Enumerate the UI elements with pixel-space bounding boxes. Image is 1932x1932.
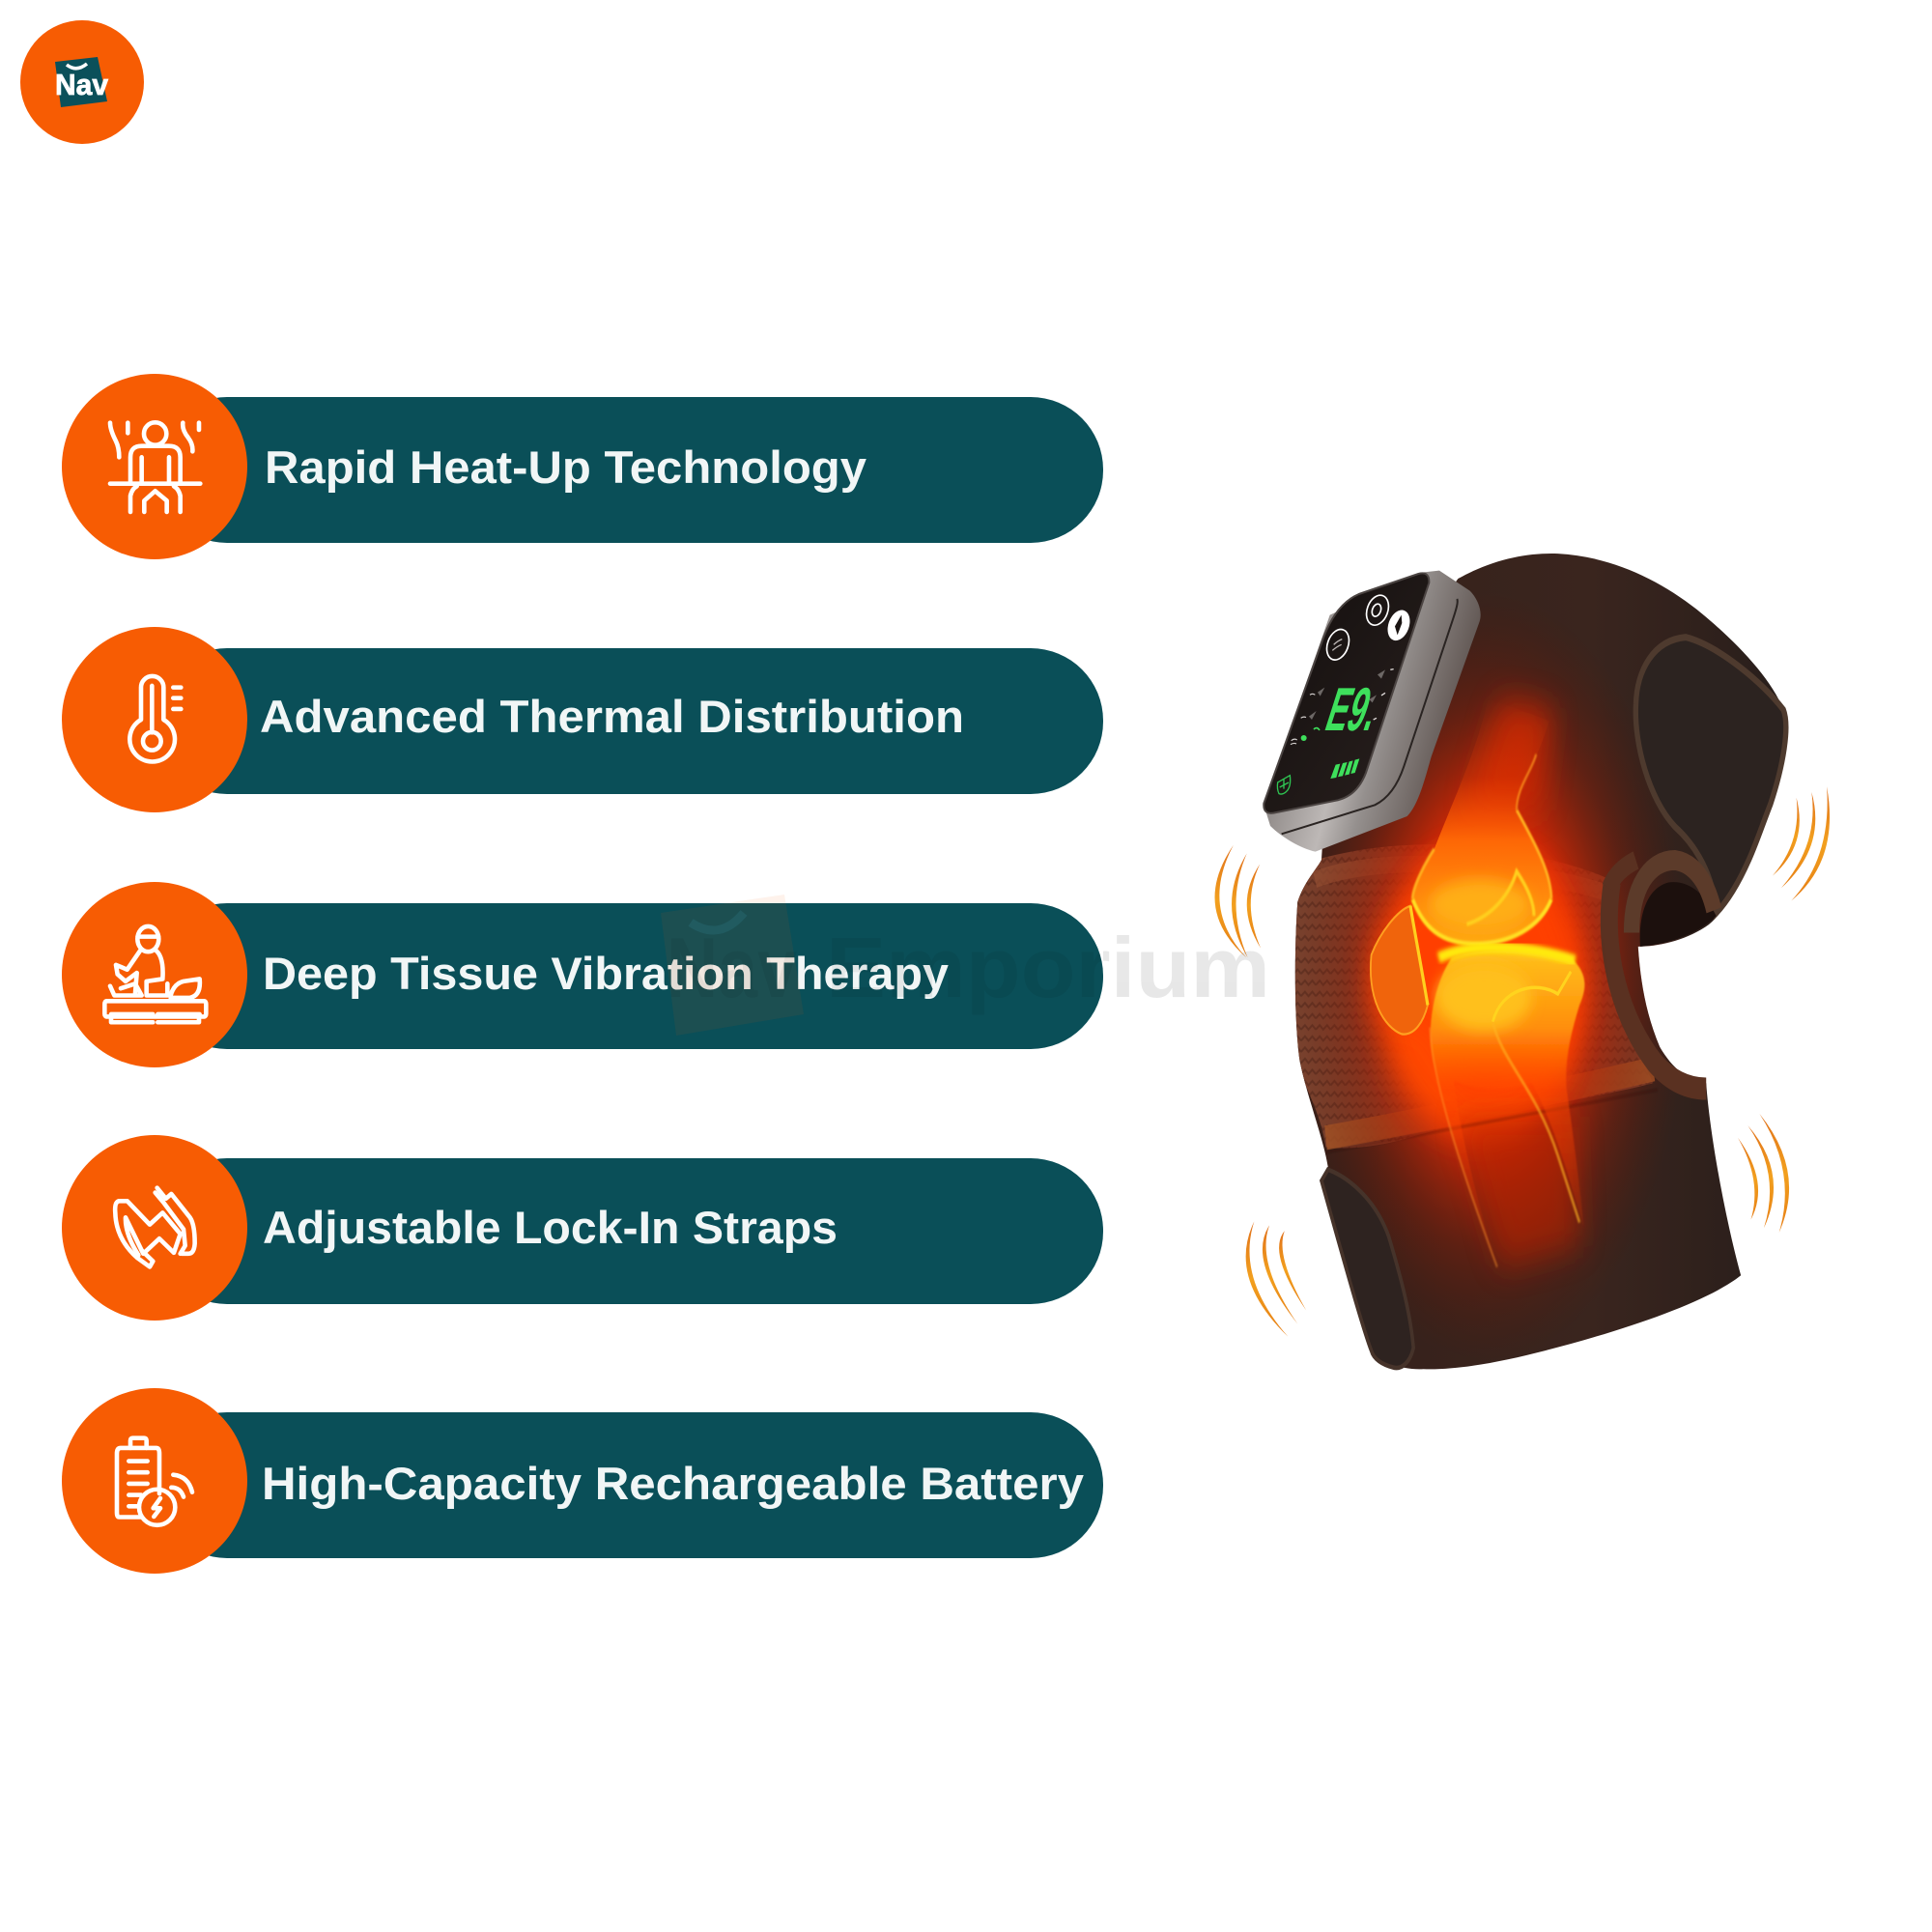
patella <box>1371 906 1428 1035</box>
watermark: Emporium <box>826 920 1270 1015</box>
icon: massage therapist <box>104 926 206 1022</box>
label: Advanced Thermal Distribution <box>260 691 964 742</box>
touch buttons <box>1322 592 1414 663</box>
mesh band and glow <box>1294 632 1671 1323</box>
feature row: Adjustable Lock-In Straps <box>62 1135 1103 1321</box>
icon: thermometer <box>129 676 181 761</box>
label: High-Capacity Rechargeable Battery <box>262 1458 1084 1509</box>
control unit with LED display <box>1264 571 1481 852</box>
tibia <box>1431 950 1584 1278</box>
watermark <box>661 895 1270 1036</box>
indicators <box>1291 669 1394 745</box>
upper strap flap <box>1635 638 1786 913</box>
femur <box>1412 698 1551 944</box>
label: Deep Tissue Vibration Therapy <box>263 948 949 999</box>
label: Rapid Heat-Up Technology <box>265 441 867 493</box>
shield icon <box>1277 776 1291 794</box>
battery bars <box>1330 758 1359 779</box>
arcs top right <box>1773 786 1830 901</box>
feature row: Deep Tissue Vibration Therapy <box>62 882 1103 1067</box>
watermark: Nav <box>667 920 797 1015</box>
arcs bottom right <box>1738 1114 1789 1233</box>
display face <box>1264 573 1429 813</box>
icon: straps <box>115 1188 195 1266</box>
glowing knee bones <box>1371 698 1584 1278</box>
feature row: High-Capacity Rechargeable Battery <box>62 1388 1103 1574</box>
brace body <box>1295 554 1786 1369</box>
vibration arcs <box>1215 786 1830 1337</box>
strap loop <box>1640 882 1717 947</box>
product: heated knee brace <box>1294 554 1789 1370</box>
logo badge <box>20 20 144 144</box>
label: Adjustable Lock-In Straps <box>263 1202 838 1253</box>
lower strap flap <box>1321 1170 1413 1368</box>
logo badge: Nav <box>55 68 109 101</box>
metal housing <box>1264 571 1481 852</box>
arcs top left <box>1215 845 1261 957</box>
watermark: Emporium <box>826 920 1270 1015</box>
feature row: Advanced Thermal Distribution <box>62 627 1103 812</box>
LED readout: E9. <box>1319 675 1388 744</box>
icon: rechargeable battery <box>117 1438 192 1525</box>
arcs bottom left <box>1246 1221 1306 1337</box>
feature row: Rapid Heat-Up Technology <box>62 374 1103 559</box>
icon: person in heat <box>110 422 200 512</box>
